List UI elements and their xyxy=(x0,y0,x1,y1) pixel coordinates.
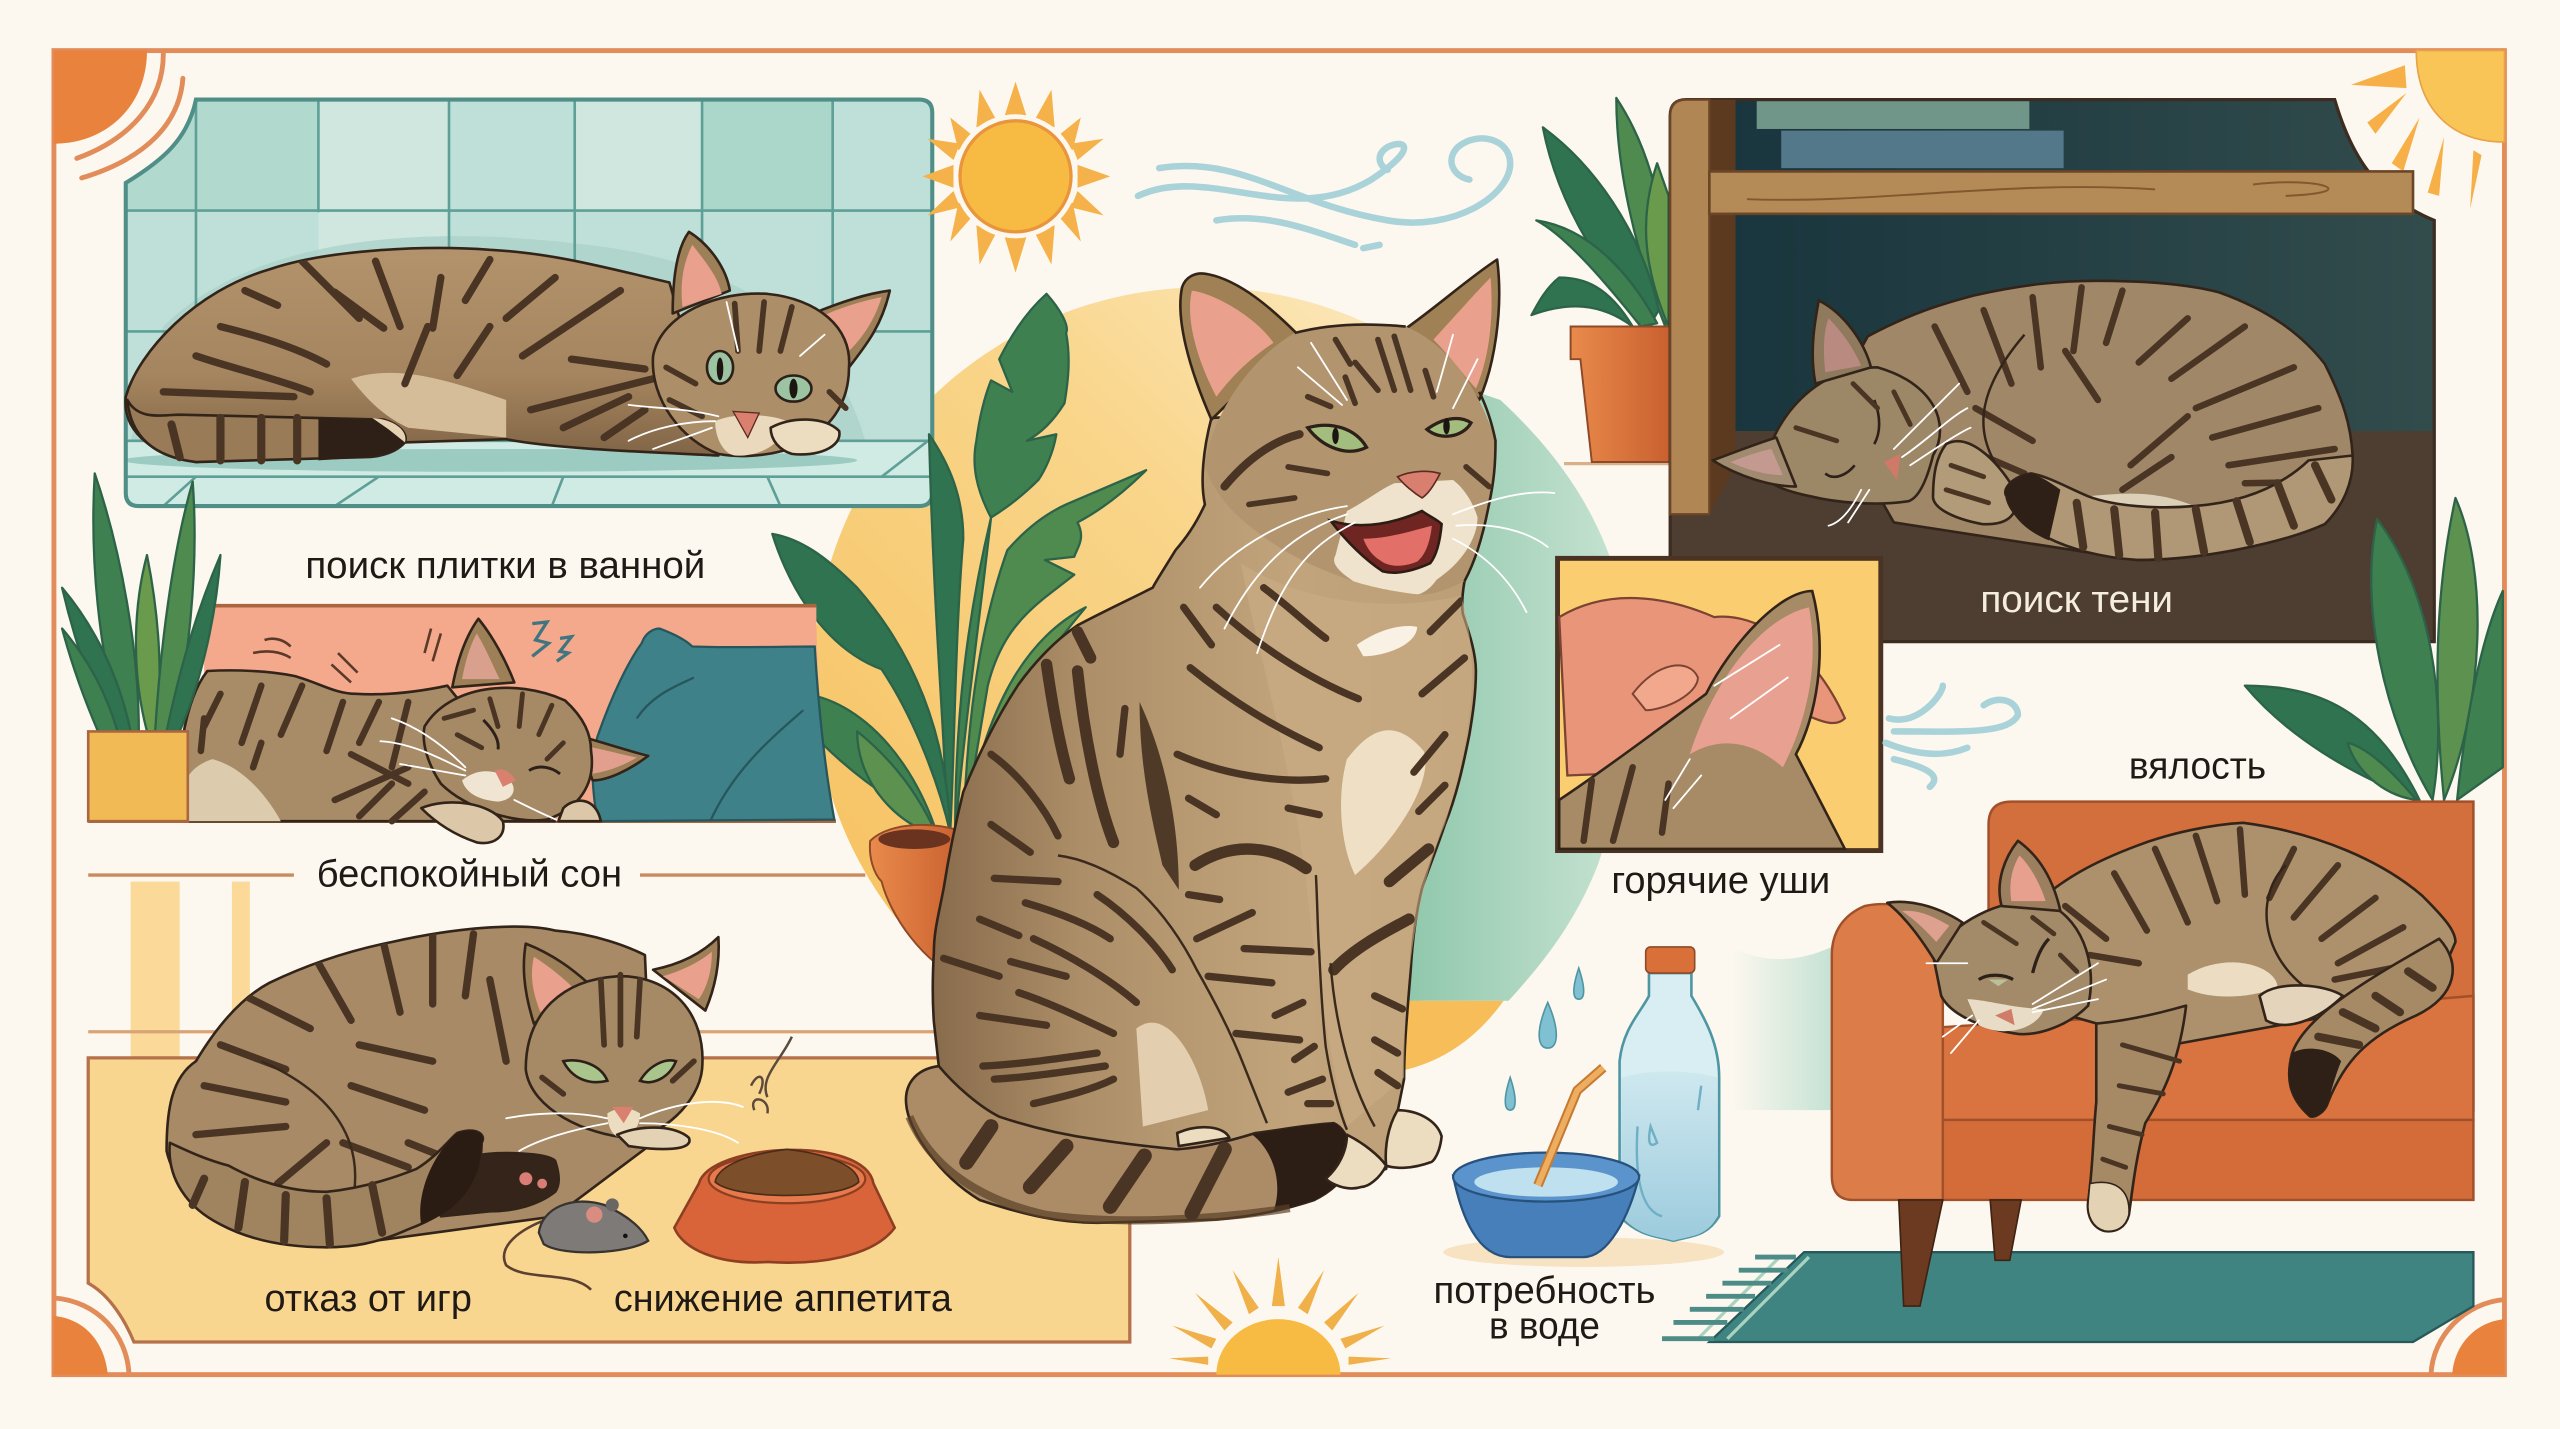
icon: sun top xyxy=(922,82,1110,273)
panel: bottom left floor xyxy=(88,882,1130,1342)
panel: hot ears xyxy=(1558,558,1881,851)
panel: restless sleep backdrop xyxy=(88,606,836,821)
main cat: panting tabby xyxy=(906,260,1554,1223)
plant: top right behind post xyxy=(1531,98,1669,327)
label: отказ от игр: отказ от игр xyxy=(265,1277,472,1319)
label: горячие уши: горячие уши xyxy=(1611,859,1830,901)
label: поиск плитки в ванной: поиск плитки в ванной xyxy=(305,544,705,586)
icon: sleep z marks xyxy=(532,622,571,661)
sofa xyxy=(1731,802,2473,1200)
label: потребность в воде: в воде xyxy=(1489,1305,1600,1347)
main cat nose xyxy=(1398,471,1440,498)
icon: sun bottom xyxy=(1169,1257,1391,1375)
cat: lying on sofa xyxy=(1887,823,2455,1231)
icon: wind top xyxy=(1138,138,1510,248)
main cat paws xyxy=(1326,1135,1386,1188)
icon: food bowl xyxy=(674,1149,895,1263)
label: потребность в воде xyxy=(1433,1269,1655,1347)
label: вялость: вялость xyxy=(2129,745,2266,787)
plant: central xyxy=(772,294,1146,836)
main cat whiskers xyxy=(1200,335,1554,653)
sofa legs xyxy=(1899,1200,2021,1306)
central circle backdrop xyxy=(813,287,1670,1071)
corner sun: bottom right xyxy=(2431,1300,2504,1375)
plant pot: central xyxy=(870,825,963,980)
icon: water droplets xyxy=(1505,968,1584,1110)
main cat open mouth xyxy=(1331,511,1442,573)
label: снижение аппетита: снижение аппетита xyxy=(614,1277,952,1319)
plant pot: yellow xyxy=(88,731,188,821)
main cat stripes xyxy=(944,588,1464,1130)
icon: food smell xyxy=(751,1037,792,1113)
cat: on bathroom tile xyxy=(125,232,890,462)
corner sun: top right xyxy=(2351,51,2504,209)
main cat tail xyxy=(906,1066,1354,1223)
panel: shade under shelf xyxy=(1670,100,2434,642)
icon: toy mouse xyxy=(504,1198,648,1290)
main cat head xyxy=(1205,325,1496,595)
label: беспокойный сон: беспокойный сон xyxy=(317,852,622,894)
plant pot: top right xyxy=(1571,327,1670,462)
main cat ears xyxy=(1180,273,1298,420)
icon: water bottle xyxy=(1443,947,1724,1267)
cat: restless sleep xyxy=(176,619,648,843)
label: поиск тени: поиск тени xyxy=(1980,578,2173,620)
rug xyxy=(1662,1252,2473,1342)
panel: bathroom tile xyxy=(122,100,932,506)
main cat eyes xyxy=(1308,418,1471,451)
icon: water bowl with straw xyxy=(1453,1068,1639,1257)
cat: curled in shade xyxy=(1713,281,2353,560)
corner sun: bottom left xyxy=(54,1298,129,1375)
plant: lower right xyxy=(2245,498,2503,800)
plant: snake plant left xyxy=(62,473,220,731)
cat: refusing food xyxy=(167,927,743,1247)
label: потребность в воде: потребность xyxy=(1433,1269,1655,1311)
icon: wind lower xyxy=(1886,686,2018,787)
corner sun: top left xyxy=(54,51,183,178)
main cat body xyxy=(933,408,1489,1182)
main cat chest and belly xyxy=(1136,563,1472,1126)
